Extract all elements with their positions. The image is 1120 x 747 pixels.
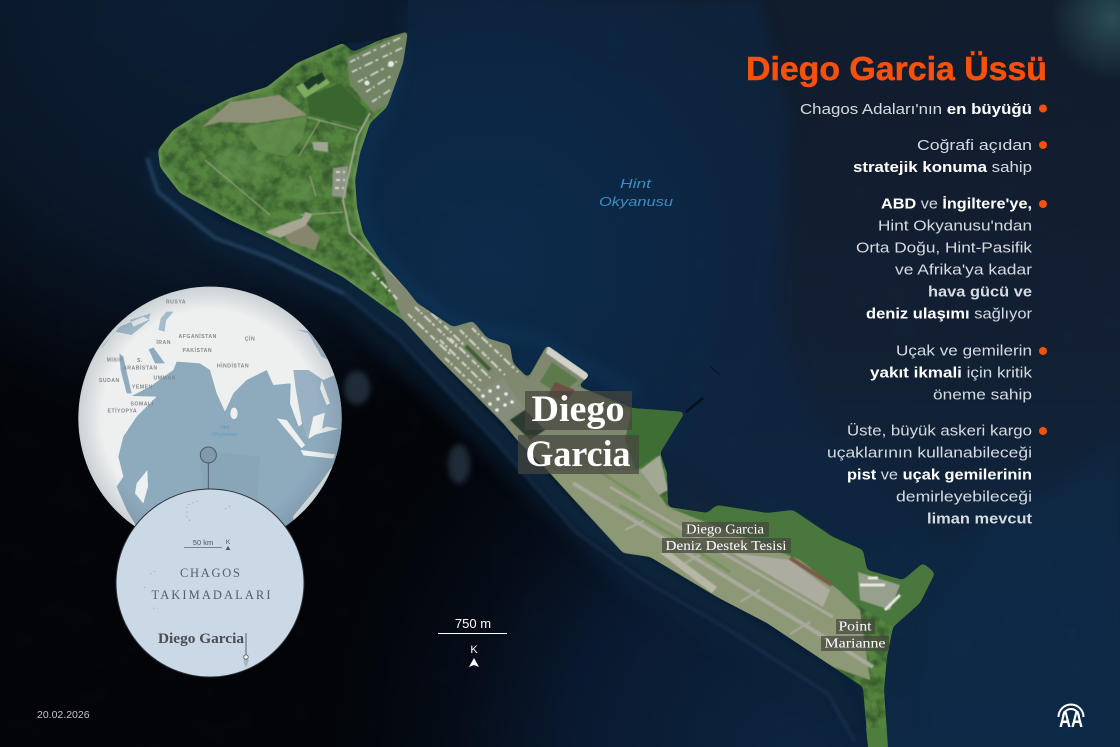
fact 4: öneme sahip (933, 386, 1032, 404)
fact 1: Chagos Adaları'nın en büyüğü (800, 101, 1032, 118)
inset scale: K (226, 539, 231, 546)
globe country labels: ETİYOPYA (108, 408, 137, 415)
map label: Point Marianne (821, 619, 889, 652)
map label: Diego Garcia Deniz Destek Tesisi: Deniz Destek Tesisi (666, 539, 787, 554)
fact 4: yakıt ikmali için kritik (870, 364, 1033, 382)
fact 3: Orta Doğu, Hint-Pasifik (856, 240, 1033, 256)
globe country labels: SOMALİ (130, 401, 154, 408)
fact 3 (856, 196, 1047, 322)
globe country labels: HİNDİSTAN (217, 363, 249, 370)
fact 2: Coğrafi açıdan (917, 137, 1032, 154)
inset map: Chagos Archipelago (116, 488, 304, 678)
dark breakwater shadows in the lagoon (686, 367, 720, 412)
inset label: Chagos Takımadaları: CHAGOS (180, 566, 240, 580)
globe country labels: MISIR (107, 357, 123, 363)
fact 5: Üste, büyük askeri kargo (847, 422, 1032, 440)
globe country labels: Okyanusu (212, 432, 237, 438)
globe country labels (99, 300, 255, 438)
fact 3: Hint Okyanusu'ndan (878, 218, 1032, 234)
map label: Point Marianne: Marianne (824, 636, 886, 652)
inset scale: 50 km (193, 538, 213, 547)
logo: AA: AA (1059, 706, 1083, 732)
globe country labels: YEMEN (132, 385, 153, 391)
fact 5: liman mevcut (927, 510, 1032, 528)
fact 5 (827, 422, 1047, 528)
sea label: Hint Okyanusu: Okyanusu (599, 194, 673, 209)
fact 5: pist ve uçak gemilerinin (847, 466, 1032, 484)
scale bar and north arrow (438, 616, 507, 667)
fact 3: ABD ve İngiltere'ye, (881, 196, 1032, 212)
map label: Diego Garcia: Garcia (526, 434, 630, 475)
clouds (344, 371, 470, 484)
globe country labels: PAKİSTAN (183, 347, 212, 354)
north forest and clearings (202, 72, 367, 250)
fact 4: Uçak ve gemilerin (896, 342, 1032, 360)
coast edge of lighter vegetation (158, 31, 417, 320)
map label: Diego Garcia Deniz Destek Tesisi: Diego Garcia (686, 522, 765, 538)
locator globe (78, 286, 342, 526)
fact 5: uçaklarının kullanabileceği (827, 444, 1032, 462)
northern base buildings (312, 32, 407, 198)
sea label: Hint Okyanusu (599, 176, 673, 209)
globe ocean (116, 362, 342, 526)
fact 4 (870, 342, 1047, 404)
map label: Diego Garcia (518, 389, 639, 475)
central built-up area (372, 262, 685, 500)
sea label: Hint Okyanusu: Hint (620, 176, 653, 191)
inset scale (184, 538, 231, 550)
title: Diego Garcia Üssü (746, 50, 1047, 87)
map label: Point Marianne: Point (838, 620, 872, 634)
globe country labels: S. (137, 358, 143, 364)
scale bar and north arrow: 750 m (455, 616, 491, 631)
inset label: Chagos Takımadaları: TAKIMADALARI (152, 588, 270, 602)
globe country labels: UMMAN (154, 376, 176, 382)
inset label: Chagos Takımadaları (152, 566, 270, 602)
main road (343, 113, 500, 385)
island south tip running to the frame edge (866, 728, 888, 747)
globe country labels: AFGANİSTAN (178, 333, 217, 340)
reef band along the west coast (147, 150, 855, 742)
globe country labels: Hint (220, 425, 230, 431)
island: Diego Garcia satellite image (140, 20, 950, 747)
scale bar and north arrow: K (470, 644, 478, 656)
fact 3: deniz ulaşımı sağlıyor (866, 306, 1032, 322)
locator ring and connector line (200, 447, 216, 492)
text block: key facts (800, 101, 1047, 528)
globe country labels: ÇİN (245, 335, 255, 342)
map label: Diego Garcia Deniz Destek Tesisi (662, 522, 791, 554)
inset label: Diego Garcia with pointer: Diego Garcia (158, 631, 245, 647)
fact 2: stratejik konuma sahip (853, 159, 1032, 176)
fact 3: hava gücü ve (928, 284, 1032, 300)
fact 3: ve Afrika'ya kadar (895, 262, 1032, 278)
airfield: runways, taxiways, apron (547, 465, 935, 680)
globe country labels: SUDAN (99, 378, 120, 384)
inset atoll dots (144, 501, 232, 609)
logo: AA (1058, 704, 1084, 732)
inset label: Diego Garcia with pointer (158, 631, 249, 668)
globe country labels: RUSYA (166, 300, 186, 306)
fact 5: demirleyebileceği (896, 488, 1032, 506)
map label: Diego Garcia: Diego (532, 389, 624, 430)
fact 2 (853, 137, 1047, 176)
globe country labels: İRAN (156, 339, 171, 346)
globe country labels: ARABİSTAN (123, 365, 158, 372)
date: 20.02.2026 (37, 709, 90, 721)
